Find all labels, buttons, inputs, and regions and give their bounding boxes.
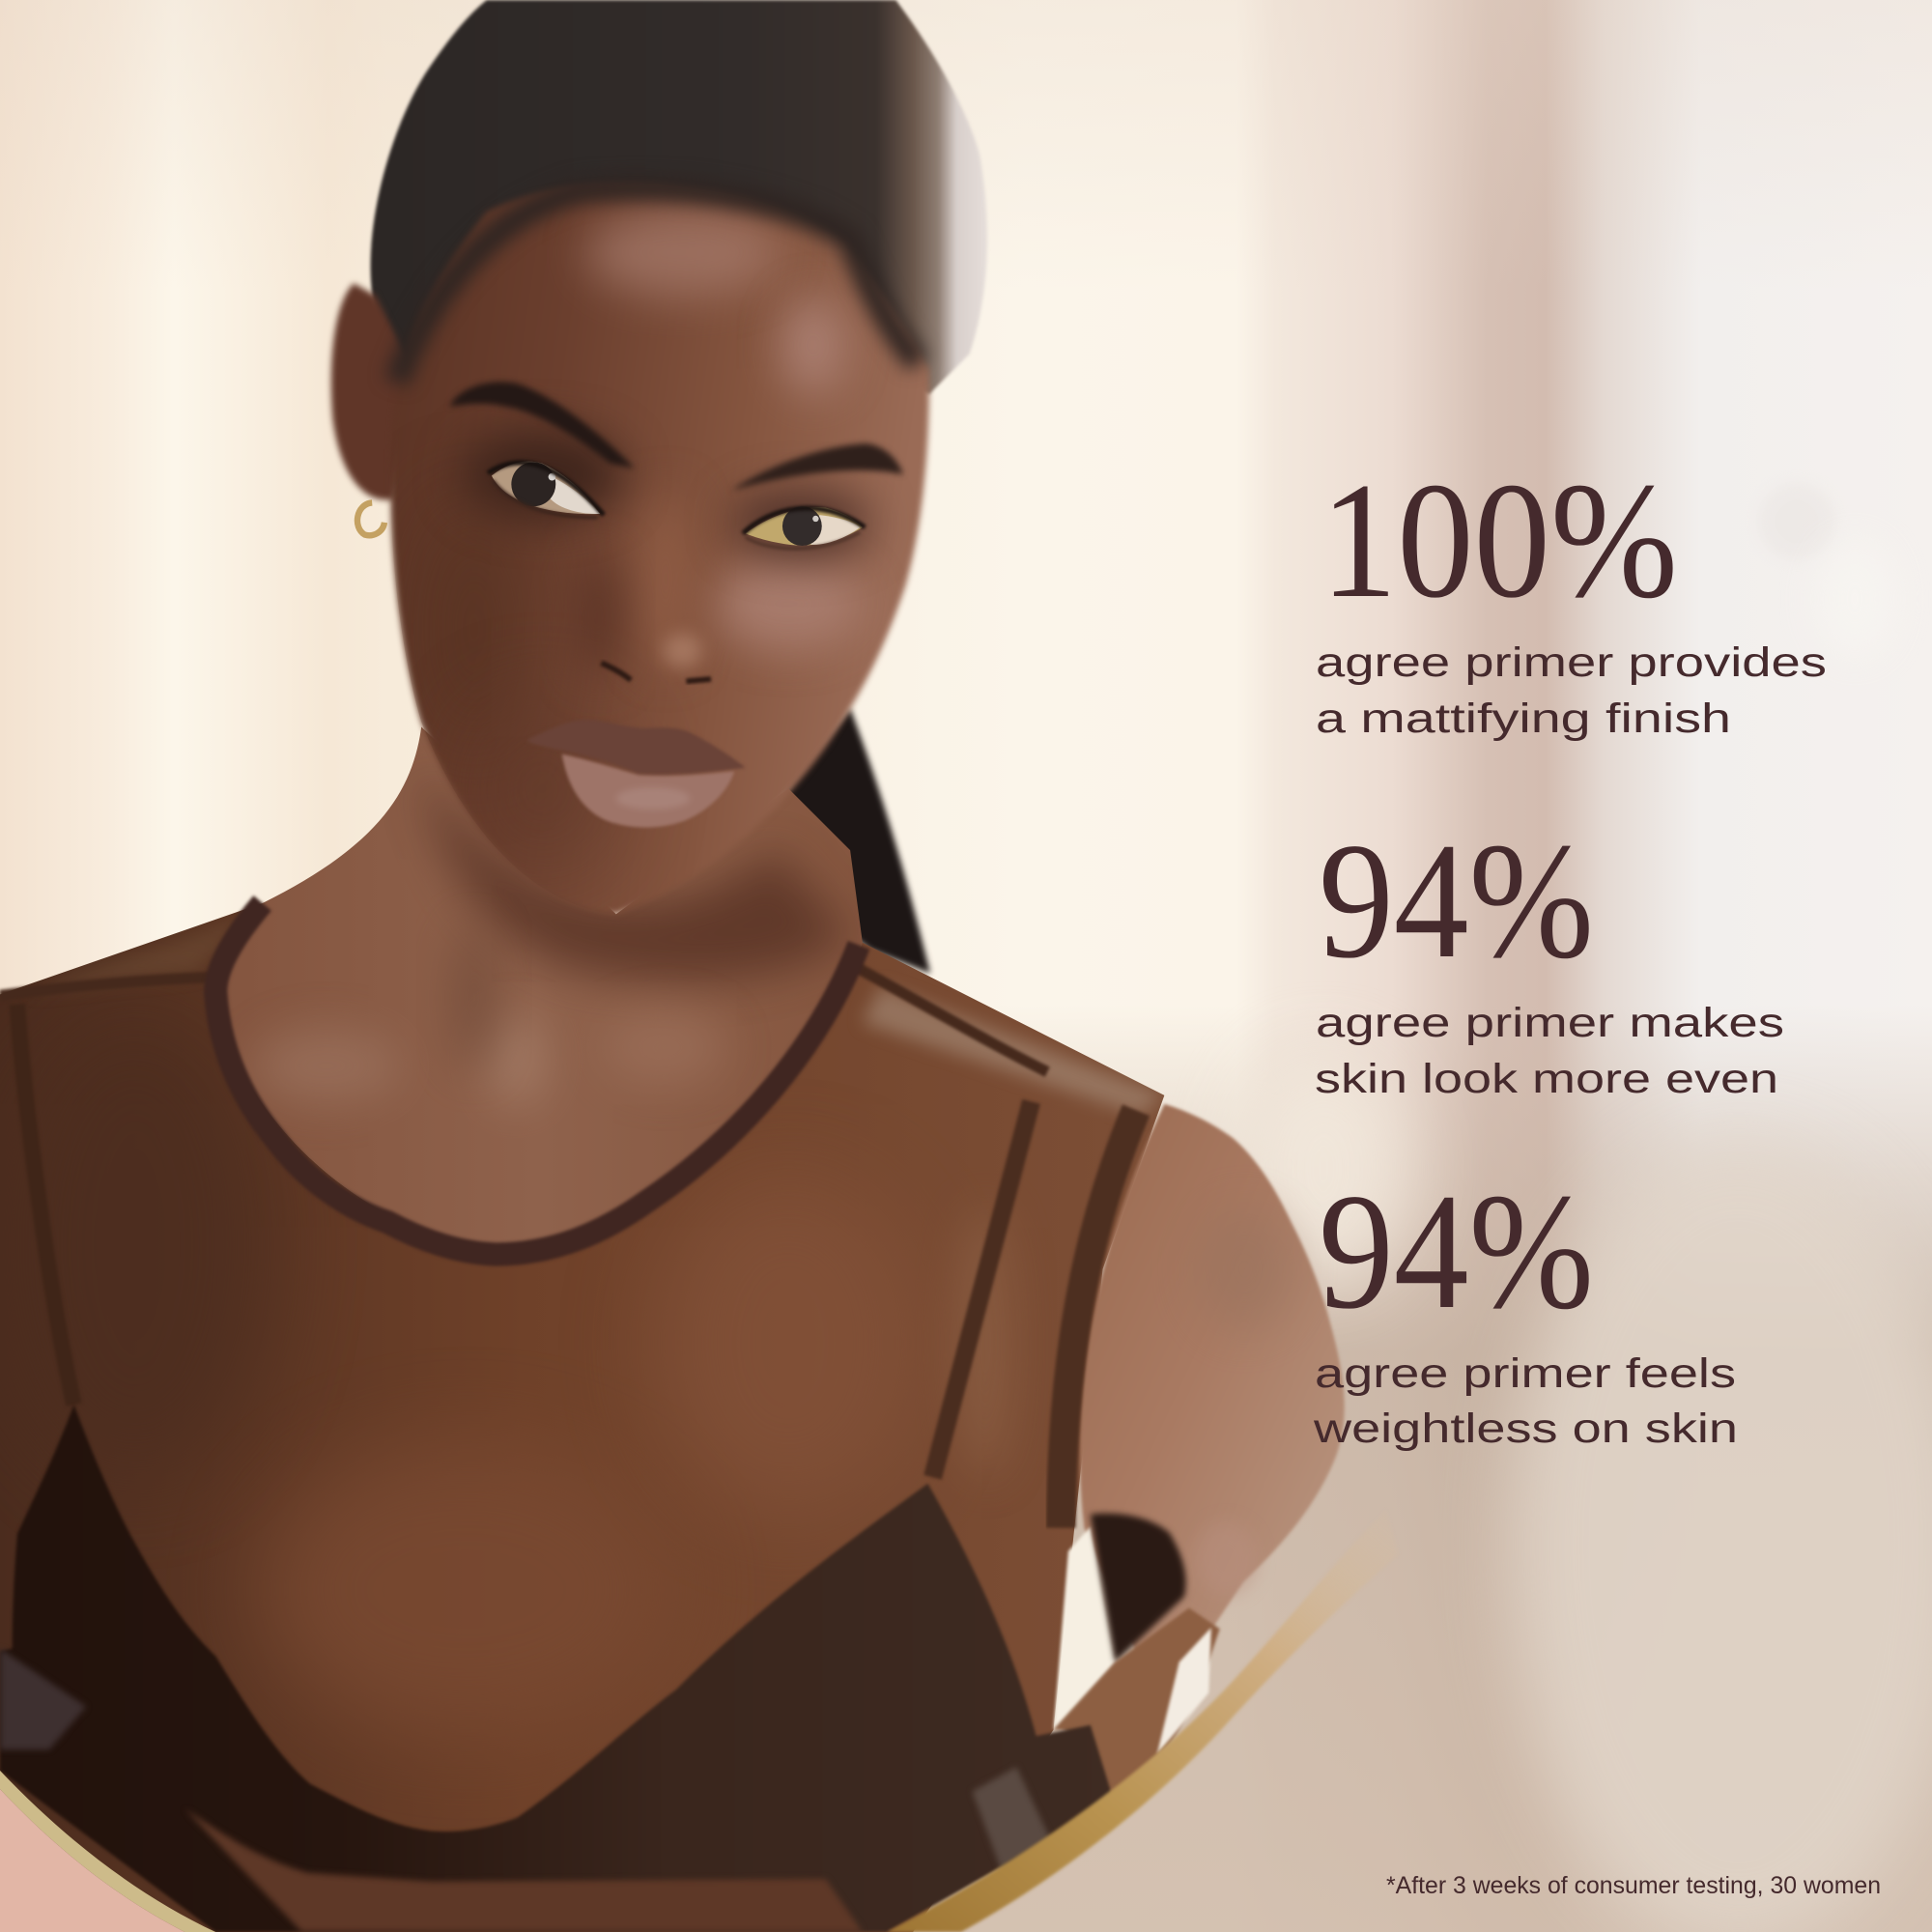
small window reflection <box>1157 1628 1211 1754</box>
stat: 94% more even <box>1315 810 1784 1102</box>
stat: 94% weightless: agree primer feels <box>1315 1350 1736 1397</box>
stat: 94% weightless: 94% <box>1319 1160 1594 1344</box>
stat: 94% weightless: weightless on skin <box>1313 1406 1738 1452</box>
neck and chest shading <box>252 764 850 1104</box>
reflected arm in mirror <box>1054 1608 1220 1802</box>
footnote: *After 3 weeks of consumer testing, 30 women <box>1386 1872 1881 1899</box>
stat: 94% more even: 94% <box>1319 810 1594 993</box>
bra <box>0 1405 1115 1932</box>
hair <box>371 0 987 419</box>
hairline shadow <box>397 187 918 382</box>
portrait of model <box>0 0 1399 1932</box>
earring <box>357 502 384 535</box>
stat: 100% mattifying finish: a mattifying finish <box>1316 696 1731 742</box>
straps <box>17 1005 1136 1528</box>
right arm and shoulder <box>1080 1104 1345 1676</box>
ear <box>331 283 412 499</box>
shoulder seam <box>0 967 1047 1072</box>
stat: 100% mattifying finish <box>1316 449 1827 742</box>
nose <box>601 663 711 681</box>
sheer top fabric <box>0 903 1164 1932</box>
stat: 100% mattifying finish: 100% <box>1321 449 1678 633</box>
stat: 94% more even: agree primer makes <box>1316 1000 1784 1046</box>
lips <box>526 720 746 828</box>
right eye <box>743 506 865 549</box>
armpit shadow <box>1091 1514 1186 1662</box>
arm shading <box>1194 1208 1293 1596</box>
stat: 100% mattifying finish: agree primer provides <box>1316 639 1827 686</box>
face shading <box>425 209 870 875</box>
stat: 94% more even: skin look more even <box>1315 1056 1778 1102</box>
skin under bra <box>185 1808 863 1932</box>
bottom right reflection patch <box>972 1767 1051 1871</box>
torso shading <box>0 918 1164 1737</box>
window behind arm <box>1054 1526 1115 1730</box>
collar band <box>215 903 859 1254</box>
face <box>390 184 929 914</box>
outer mirror corner <box>0 1789 185 1932</box>
left reflection patch <box>0 1649 86 1749</box>
left eyebrow <box>450 382 635 469</box>
right eyebrow <box>732 443 903 491</box>
ponytail <box>774 708 930 974</box>
left eye <box>488 462 604 518</box>
neck and chest skin <box>215 727 863 1256</box>
stat: 94% weightless <box>1313 1160 1738 1452</box>
mirror gold frame <box>0 1509 1399 1932</box>
